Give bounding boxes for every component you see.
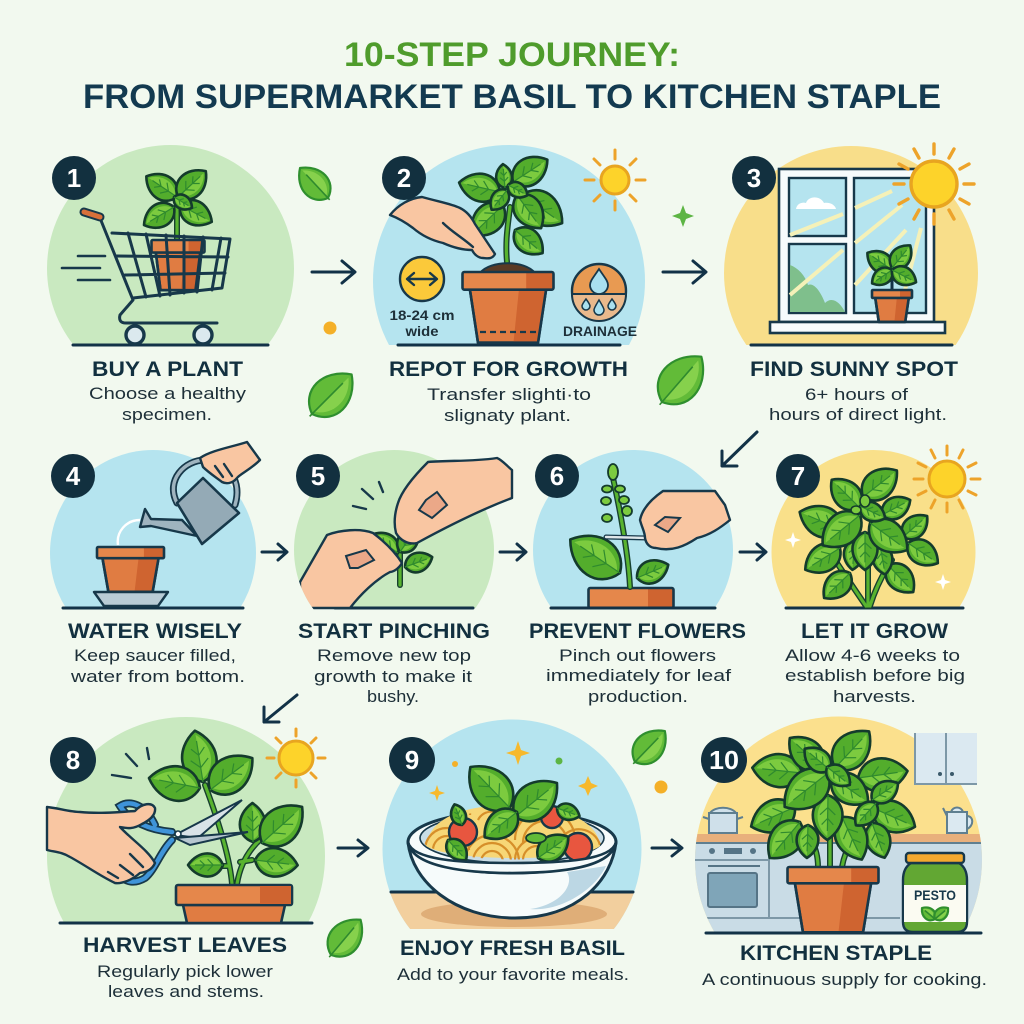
panel: step 9 enjoy: [382, 720, 642, 929]
icon: shopping cart: [62, 212, 230, 344]
icon: bushy basil: [794, 459, 944, 607]
panel: step 6 flowers: [533, 450, 733, 610]
step 5 label: Remove new top: [317, 646, 471, 665]
badge 9: [389, 737, 435, 783]
icon: hand with scissors: [47, 804, 155, 883]
icon: pot rim: [587, 586, 675, 606]
title: 10-STEP JOURNEY:: [344, 36, 680, 74]
step 7 label: establish before big: [785, 666, 965, 685]
icon: wall cabinet: [915, 733, 977, 784]
table surface: [390, 893, 634, 929]
step 10 label: [702, 942, 987, 989]
step 7 label: LET IT GROW: [801, 620, 948, 643]
badge 1: [52, 156, 96, 200]
icon: drainage: [563, 264, 637, 339]
panel: step 4 water: [50, 440, 262, 610]
arrow 8 to 9: [338, 840, 368, 856]
icon: sun: [267, 729, 325, 787]
step 1 label: BUY A PLANT: [92, 358, 243, 381]
step 7 label: harvests.: [833, 687, 916, 706]
badge 3: 3: [747, 163, 761, 193]
icon: kitchen background: [690, 834, 990, 933]
step 9 label: ENJOY FRESH BASIL: [400, 937, 625, 960]
step 2 label: REPOT FOR GROWTH: [389, 358, 628, 381]
badge 2: [382, 156, 426, 200]
step 6 label: PREVENT FLOWERS: [529, 620, 746, 643]
step 8 label: Regularly pick lower: [97, 962, 273, 981]
badge 5: [296, 454, 340, 498]
icon: width: [390, 257, 454, 339]
panel: step 2 repot: [373, 145, 646, 346]
step 1 label: [89, 358, 247, 424]
icon: width: wide: [404, 323, 439, 339]
title: [83, 36, 941, 116]
step 8 label: leaves and stems.: [108, 982, 264, 1001]
step 4 label: [68, 620, 245, 686]
icon: large basil: [745, 720, 921, 932]
step 3 label: [750, 358, 958, 424]
panel: step 7 let it grow: [772, 444, 982, 610]
step 5 label: bushy.: [367, 687, 419, 706]
step 8 label: HARVEST LEAVES: [83, 934, 287, 957]
sparkles and dots: [429, 741, 598, 801]
arrow 9 to 10: [652, 840, 682, 856]
decorative dots and sparkle: [324, 205, 694, 794]
icon: width: 18-24 cm: [390, 307, 454, 323]
step 9 label: [397, 937, 629, 984]
badge 4: [51, 454, 95, 498]
step 7 label: Allow 4-6 weeks to: [785, 646, 960, 665]
icon: pesto jar: PESTO: [914, 887, 956, 903]
step 3 label: 6+ hours of: [805, 385, 908, 404]
icon: large basil plant: [146, 728, 314, 884]
icon: drainage: DRAINAGE: [563, 323, 637, 339]
badge 4: 4: [66, 461, 81, 491]
panel: step 3 sunny spot: [724, 142, 978, 346]
icon: right hand: [395, 458, 512, 543]
step 6 label: Pinch out flowers: [559, 646, 716, 665]
step 6 label: immediately for leaf: [546, 666, 731, 685]
panel: step 8 harvest: [46, 717, 326, 924]
icon: window: [770, 169, 945, 333]
icon: stove pot: [703, 808, 743, 833]
badge 7: [776, 454, 820, 498]
badge 1: 1: [67, 163, 81, 193]
step 10 label: A continuous supply for cooking.: [702, 970, 987, 989]
icon: pot: [176, 885, 292, 923]
step 1 label: Choose a healthy: [89, 384, 247, 403]
badge 6: [535, 454, 579, 498]
step 10 label: KITCHEN STAPLE: [740, 942, 932, 965]
panel: step 10 kitchen staple: [695, 716, 982, 934]
step 6 label: production.: [588, 687, 688, 706]
step 8 label: [83, 934, 287, 1001]
step 5 label: growth to make it: [314, 667, 472, 686]
icon: hand: [390, 197, 495, 258]
panel: step 1 buy a plant: [47, 145, 294, 346]
icon: kettle: [943, 808, 972, 833]
decorative floating leaves: [290, 159, 716, 967]
step 4 label: water from bottom.: [70, 667, 245, 686]
arrow 6 to 7: [740, 544, 766, 560]
step 5 label: START PINCHING: [298, 620, 490, 643]
icon: window plant: [862, 239, 920, 322]
icon: left hand: [300, 530, 402, 608]
badge 8: [50, 737, 96, 783]
step 2 label: [389, 358, 628, 425]
badge 3: [732, 156, 776, 200]
arrow 4 to 5: [262, 544, 287, 560]
step 2 label: slignaty plant.: [444, 406, 571, 425]
icon: snipping hand: [606, 491, 730, 549]
panel: step 5 pinching: [294, 450, 514, 610]
badge 2: 2: [397, 163, 411, 193]
badge 7: 7: [791, 461, 805, 491]
step 4 label: Keep saucer filled,: [74, 646, 236, 665]
icon: hand on can: [200, 442, 260, 483]
icon: stem with leaves: [366, 523, 436, 585]
badge 5: 5: [311, 461, 325, 491]
step 6 label: [529, 620, 746, 706]
step 5 label: [298, 620, 490, 706]
icon: basil in pot: [456, 148, 571, 343]
arrow 2 to 3: [663, 261, 706, 283]
badge 6: 6: [550, 461, 564, 491]
icon: sun: [914, 446, 980, 512]
step 3 label: FIND SUNNY SPOT: [750, 358, 958, 381]
step 9 label: Add to your favorite meals.: [397, 965, 629, 984]
icon: plant in cart: [138, 162, 217, 290]
badge 10: 10: [709, 745, 739, 775]
sparkles: [785, 532, 951, 590]
icon: big sun: [894, 144, 974, 224]
badge 10: [701, 737, 747, 783]
arrow 3 to 4 diagonal: [722, 432, 757, 466]
arrow 1 to 2: [312, 261, 355, 283]
step 3 label: hours of direct light.: [769, 405, 947, 424]
badge 9: 9: [405, 745, 419, 775]
step 1 label: specimen.: [122, 405, 212, 424]
step 4 label: WATER WISELY: [68, 620, 242, 643]
icon: bowl: [408, 811, 616, 918]
step 7 label: [785, 620, 965, 706]
arrow 7 to 8 diagonal: [264, 695, 297, 722]
bowl front rim: [408, 842, 616, 873]
icon: pesto jar: [903, 853, 967, 932]
icon: flowering basil: [559, 464, 673, 589]
badge 8: 8: [66, 745, 80, 775]
icon: pot and saucer: [94, 547, 168, 606]
icon: watering can: [118, 460, 239, 545]
step 2 label: Transfer slighti·to: [427, 385, 591, 404]
icon: scissors: [120, 800, 248, 882]
arrow 5 to 6: [500, 544, 526, 560]
icon: sun small: [585, 150, 645, 210]
icon: pasta: [424, 765, 601, 862]
title: FROM SUPERMARKET BASIL TO KITCHEN STAPLE: [83, 78, 941, 116]
